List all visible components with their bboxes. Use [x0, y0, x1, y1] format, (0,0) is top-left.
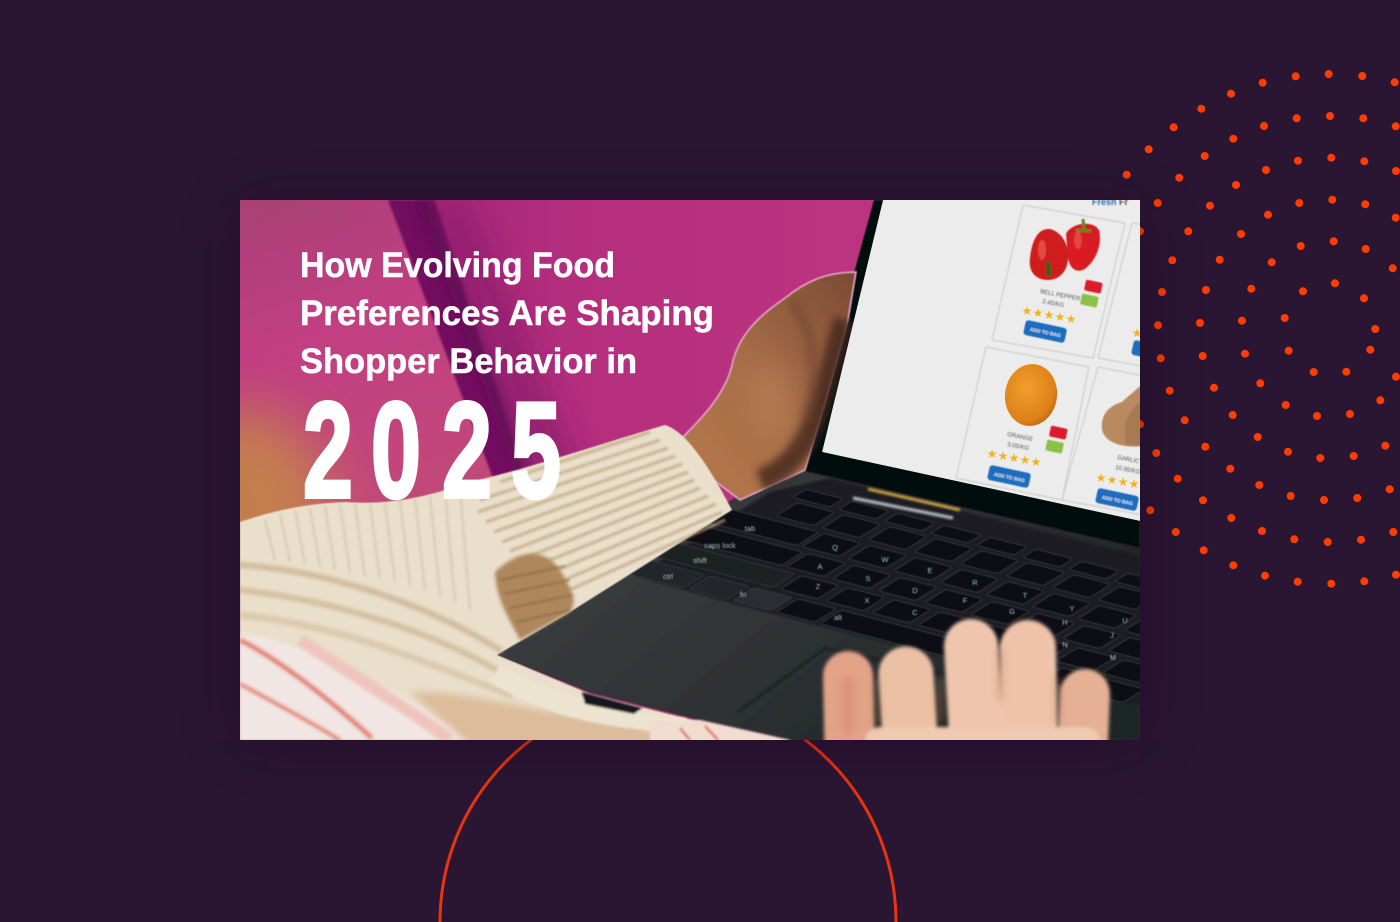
screen: product names and prices: 10.95/KG: [1115, 465, 1141, 476]
screen: product names and prices: BELL PEPPER: [1040, 289, 1081, 303]
photo: laptop lid and bezel: [800, 200, 1140, 548]
photo: key legends: Y: [1069, 604, 1075, 613]
photo: key legends: M: [1110, 653, 1116, 662]
photo: key legends: N: [1062, 640, 1068, 649]
screen: product names and prices: [1007, 289, 1141, 476]
title: [300, 245, 714, 381]
screen: rating stars: ★: [998, 449, 1008, 463]
screen: add to bag buttons: ADD TO BAG: [1101, 495, 1133, 507]
decorative orange dot pattern: [1127, 74, 1396, 584]
photo: key legends: alt: [834, 613, 843, 622]
photo: key legends: shift: [693, 556, 708, 565]
screen: rating stars: ★: [1066, 312, 1076, 326]
screen: rating stars: ★: [1009, 451, 1019, 465]
photo: key legends: R: [972, 578, 978, 587]
screen: rating stars: ★: [1055, 310, 1065, 324]
sweater: cuff ribbing: [478, 432, 725, 596]
photo: key legends: U: [1122, 616, 1128, 625]
screen: product names and prices: GARLIC: [1117, 455, 1140, 465]
photo: sleeve edge and shadow under laptop: [490, 664, 790, 745]
screen: rating stars: ★: [1022, 304, 1032, 318]
screen: rating stars: ★: [1118, 475, 1128, 489]
year 2025: 0: [371, 375, 421, 527]
sweater: folded sleeve bands: [240, 565, 510, 695]
photo: key legends: tab: [745, 524, 755, 533]
infographic canvas: [240, 70, 1400, 922]
screen: badges: [1045, 279, 1103, 454]
card shadow: [240, 210, 1140, 740]
sweater: tan fold patch: [495, 554, 574, 640]
year 2025: 2: [442, 375, 492, 527]
screen: bell peppers: [1030, 219, 1100, 280]
photo: hand holding the screen: [680, 272, 856, 500]
screen: orange: [1004, 364, 1058, 426]
photo: key legends: T: [1023, 591, 1028, 600]
sweater: vertical knit on upper sleeve: [265, 488, 470, 610]
photo: keyboard keys: [631, 489, 1140, 702]
screen: rating stars: ★: [1020, 453, 1030, 467]
year 2025: 5: [511, 375, 561, 527]
photo: key legends: E: [927, 566, 933, 575]
screen: rating stars: ★: [1031, 455, 1041, 469]
screen: rating stars: ★: [1129, 477, 1139, 491]
photo: key legends: [663, 524, 1128, 662]
photo: key legends: ctrl: [663, 572, 673, 581]
screen: add to bag buttons: ADD TO BAG: [993, 472, 1025, 484]
screen: add to bag buttons: [986, 320, 1140, 512]
photo: laptop deck and palm rest: [497, 471, 1140, 740]
title: How Evolving Food: [300, 245, 615, 285]
photo: wrist under sleeve: [410, 692, 670, 745]
photo: key legends: caps lock: [704, 541, 736, 550]
screen: product card outlines: [955, 204, 1140, 516]
photo: key legends: C: [912, 608, 918, 617]
title: Shopper Behavior in: [300, 341, 637, 381]
photo: striped white shirt sleeve: [240, 634, 475, 740]
photo: key legends: Q: [832, 543, 838, 552]
photo: key legends: S: [865, 574, 871, 583]
screen: rating stars: ★: [987, 447, 997, 461]
photo: key legends: H: [1062, 618, 1068, 627]
photo: cream knit sweater: [240, 425, 732, 740]
screen: add to bag buttons: ADD TO BAG: [1029, 327, 1061, 339]
screen: rating stars: ★: [1107, 473, 1117, 487]
photo: key legends: G: [1009, 607, 1015, 616]
photo: laptop screen: [822, 200, 1140, 521]
screen: garlic: [1102, 386, 1146, 447]
title: Preferences Are Shaping: [300, 293, 714, 333]
screen: rating stars: ★: [1044, 308, 1054, 322]
photo: keyboard well: [636, 478, 1140, 705]
photo: key legends: F: [963, 596, 968, 605]
photo: key legends: D: [912, 586, 918, 595]
photo: magenta sofa: [240, 200, 596, 606]
screen: rating stars: ★: [1033, 306, 1043, 320]
photo: key legends: W: [881, 555, 889, 564]
photo: hinge highlights: [853, 489, 960, 518]
photo: key legends: X: [864, 596, 870, 605]
photo: touchpad outline: [738, 648, 950, 712]
year 2025: [303, 375, 561, 527]
photo: key legends: J: [1110, 631, 1114, 640]
photo: fingers on the keyboard: [848, 646, 1085, 770]
screen: product names and prices: 3.05/KG: [1007, 442, 1030, 452]
photo: key legends: A: [817, 562, 823, 571]
photo: key legends: fn: [740, 590, 746, 599]
screen: product names and prices: 2.45/KG: [1042, 299, 1065, 309]
screen: rating stars: ★: [1096, 471, 1106, 485]
photo: key legends: Z: [816, 582, 821, 591]
screen: product names and prices: ORANGE: [1007, 432, 1033, 443]
decorative orange circle outline: [440, 694, 896, 922]
year 2025: 2: [303, 375, 353, 527]
screen: site header text: Fresh Fr: [1092, 197, 1129, 207]
screen: rating stars: [987, 304, 1142, 491]
screen: rating stars: ★: [1132, 326, 1142, 340]
photo panel: person shopping for groceries on a laptop: [240, 200, 1140, 740]
